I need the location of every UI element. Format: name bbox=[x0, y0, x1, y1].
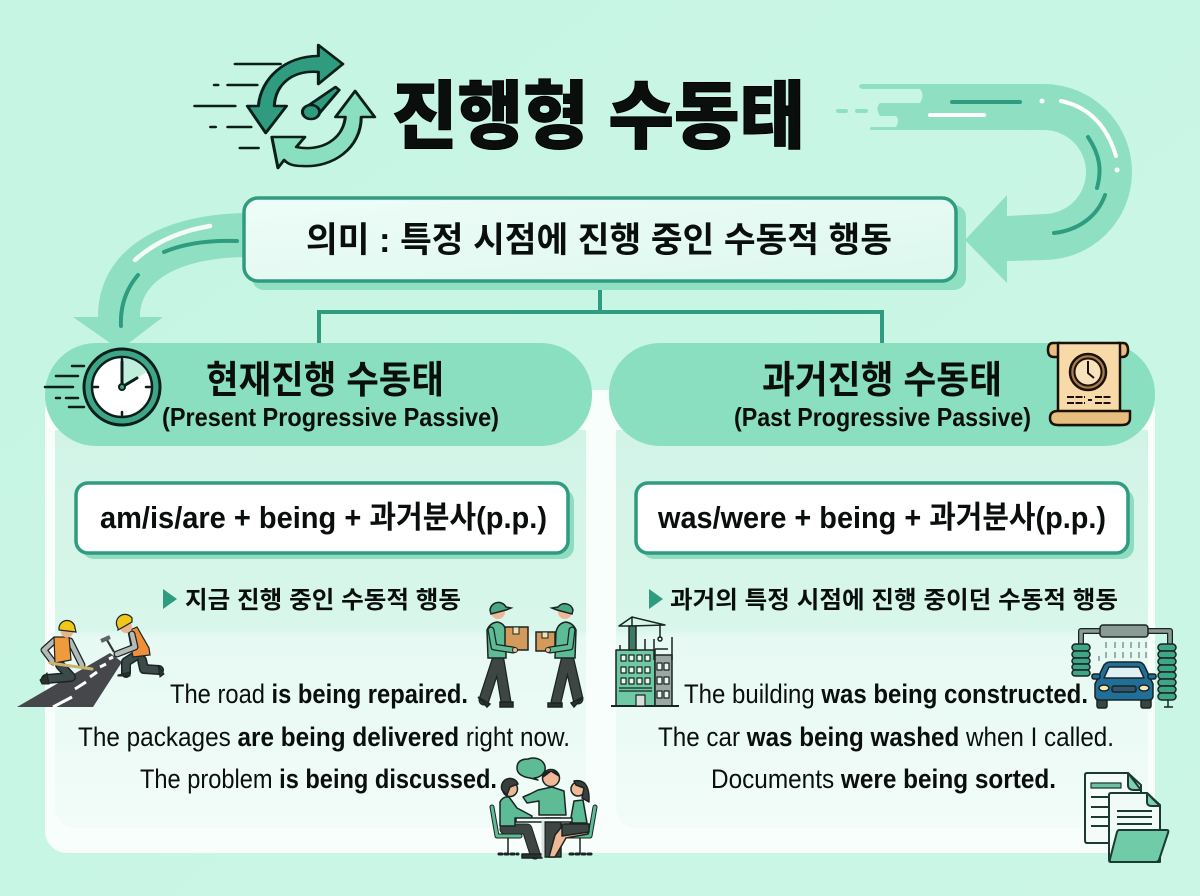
right worker bbox=[536, 604, 583, 707]
header: present progressive: 현재진행 수동태 bbox=[206, 360, 444, 402]
examples: past: Documents were being sorted. bbox=[711, 764, 1056, 794]
header: past progressive bbox=[609, 343, 1155, 446]
subheading: past: 과거의 특정 시점에 진행 중이던 수동적 행동 bbox=[670, 587, 1118, 614]
formula box: past bbox=[636, 483, 1134, 559]
panel: white container bbox=[45, 390, 1155, 853]
header: past progressive: (Past Progressive Passive) bbox=[734, 402, 1031, 432]
panel: past inner bbox=[616, 430, 1148, 828]
subheading: present: 지금 진행 중인 수동적 행동 bbox=[185, 587, 461, 614]
icon: clock bbox=[45, 349, 160, 425]
formula box: present bbox=[76, 483, 574, 559]
examples: present: The packages are being delivered right now. bbox=[78, 722, 570, 752]
left worker bbox=[478, 602, 528, 707]
header: present progressive bbox=[45, 343, 592, 446]
connector lines bbox=[319, 281, 882, 343]
header: present progressive: (Present Progressive Passive) bbox=[162, 402, 499, 432]
formula box: past: was/were + being + 과거분사(p.p.) bbox=[657, 500, 1106, 535]
meaning box bbox=[244, 198, 966, 290]
arrow: left curved arrow bbox=[73, 213, 250, 350]
icon: cycle arrows with speed lines bbox=[195, 45, 375, 168]
examples: past: The car was being washed when I called. bbox=[658, 722, 1114, 752]
illustration: road workers bbox=[17, 614, 164, 707]
meaning box: 의미 : 특정 시점에 진행 중인 수동적 행동 bbox=[306, 221, 892, 260]
title: 진행형 수동태 bbox=[392, 75, 805, 158]
examples: past: The building was being constructed. bbox=[684, 679, 1088, 709]
illustration: meeting bbox=[492, 758, 595, 858]
examples: present: The road is being repaired. bbox=[170, 679, 468, 709]
icon: scroll bbox=[1048, 343, 1130, 425]
illustration: documents and folder bbox=[1085, 773, 1168, 862]
illustration: building with crane bbox=[611, 617, 679, 706]
illustration: car wash bbox=[1072, 625, 1176, 708]
examples: present bbox=[78, 679, 570, 794]
illustration: delivery workers bbox=[478, 602, 583, 707]
panel: present inner bbox=[55, 430, 586, 828]
examples: present: The problem is being discussed. bbox=[140, 764, 497, 794]
header: past progressive: 과거진행 수동태 bbox=[762, 360, 1002, 402]
formula box: present: am/is/are + being + 과거분사(p.p.) bbox=[100, 500, 547, 535]
arrow: top right curved arrow bbox=[838, 84, 1132, 283]
examples: past bbox=[658, 679, 1114, 794]
